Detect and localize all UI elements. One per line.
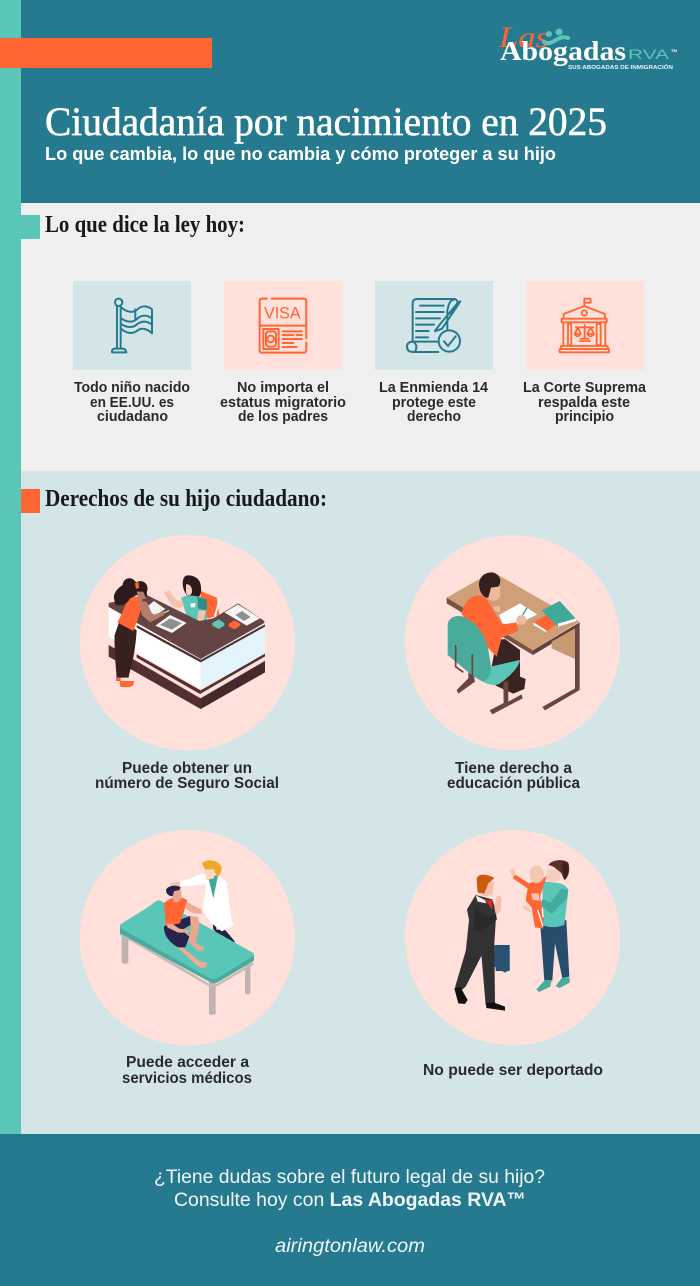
desk boxes <box>212 619 224 629</box>
panel: footer <box>0 1134 700 1286</box>
hand <box>516 615 526 625</box>
heading marker: teal square <box>21 215 40 239</box>
logo tagline: SUS ABOGADAS DE INMIGRACIÓN <box>568 63 673 71</box>
desk base <box>109 645 265 709</box>
caption: parents status <box>220 380 346 425</box>
caption: social security <box>95 760 279 792</box>
caption: every child <box>74 380 190 425</box>
lawyer <box>454 875 505 1011</box>
caption: education <box>447 760 580 792</box>
panel: header <box>0 0 700 203</box>
caption: education: Tiene derecho a <box>455 760 572 777</box>
logo word: RVA: RVA <box>628 46 670 62</box>
illustration: lawyer with mother and baby <box>405 830 620 1045</box>
heading: rights: Derechos de su hijo ciudadano: <box>45 486 327 512</box>
table legs <box>122 933 128 964</box>
shirt <box>462 595 518 657</box>
baby <box>510 866 547 929</box>
caption: every child: Todo niño nacido <box>74 380 190 396</box>
logo word: Abogadas: Abogadas <box>500 36 626 66</box>
illustration: reception desk <box>80 535 295 750</box>
card: supreme court <box>526 281 644 370</box>
caption: medical services: servicios médicos <box>122 1070 252 1087</box>
subtitle: Lo que cambia, lo que no cambia y cómo proteger a su hijo <box>45 144 556 164</box>
caption: amendment: La Enmienda 14 <box>379 380 488 396</box>
logo <box>498 21 677 71</box>
caption: amendment <box>379 380 488 425</box>
caption: cannot be deported: No puede ser deportado <box>423 1062 603 1079</box>
patient <box>164 886 207 968</box>
desk top <box>109 595 264 659</box>
icon: courthouse <box>560 299 609 352</box>
left vertical stripe <box>0 0 21 1134</box>
desk <box>447 572 580 650</box>
caption: supreme court: principio <box>555 409 614 425</box>
caption: every child: ciudadano <box>97 409 168 425</box>
paper and books <box>499 603 537 626</box>
heading: what the law says: Lo que dice la ley hoy: <box>45 212 245 238</box>
desk white front <box>109 606 201 689</box>
heading marker: orange square <box>21 489 40 513</box>
receptionist <box>164 575 221 623</box>
icon: document with pen and check <box>407 299 460 352</box>
footer question: ¿Tiene dudas sobre el futuro legal de su hijo? <box>154 1166 545 1188</box>
caption: supreme court <box>523 380 647 425</box>
caption: social security: Puede obtener un <box>122 760 252 777</box>
doctor <box>169 860 235 943</box>
head <box>487 585 500 601</box>
caption: parents status: de los padres <box>238 409 328 425</box>
icon: flag <box>112 299 152 352</box>
caption: supreme court: La Corte Suprema <box>523 380 647 396</box>
title: Ciudadanía por nacimiento en 2025 <box>45 99 607 144</box>
table pad <box>120 901 254 983</box>
panel: what the law says <box>0 203 700 471</box>
caption: amendment: derecho <box>407 409 461 425</box>
panel: rights of the citizen child <box>0 471 700 1134</box>
illustration: doctor and patient <box>80 830 295 1045</box>
footer call to action: Consulte hoy con Las Abogadas RVA™ <box>174 1189 526 1211</box>
logo script: Las: Las <box>498 21 549 54</box>
logo figures <box>544 30 568 43</box>
mother <box>536 860 570 992</box>
briefcase <box>494 945 510 973</box>
orange accent bar <box>0 38 212 68</box>
caption: medical services: Puede acceder a <box>126 1054 249 1071</box>
caption: supreme court: respalda este <box>538 395 630 411</box>
caption: every child: en EE.UU. es <box>90 395 174 411</box>
logo trademark: TM <box>671 48 677 53</box>
papers <box>145 601 165 616</box>
caption: medical services <box>122 1054 252 1087</box>
card: amendment <box>375 281 493 370</box>
caption: parents status: estatus migratorio <box>220 395 346 411</box>
card: flag <box>73 281 191 370</box>
icon: visa document: VISA <box>264 303 301 322</box>
caption: education: educación pública <box>447 775 580 792</box>
pants <box>492 639 526 694</box>
footer website: airingtonlaw.com <box>275 1235 425 1257</box>
card: visa <box>224 281 342 370</box>
caption: parents status: No importa el <box>237 380 329 396</box>
customer <box>114 578 165 687</box>
chair <box>457 673 523 714</box>
caption: social security: número de Seguro Social <box>95 775 279 792</box>
card captions <box>74 380 647 425</box>
caption: amendment: protege este <box>392 395 476 411</box>
illustration: student at desk <box>405 535 620 750</box>
